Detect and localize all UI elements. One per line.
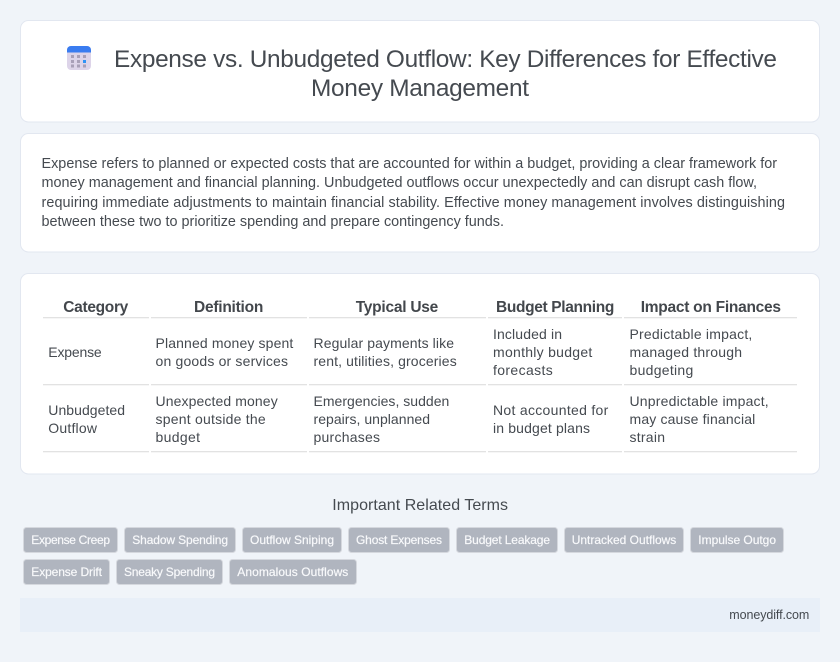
description text: between these two to prioritize spending and prepare contingency funds. <box>42 214 504 230</box>
table header row: Typical Use <box>356 299 439 316</box>
description text: Expense refers to planned or expected costs that are accounted for within a budget, providing a clear framework for <box>42 156 777 172</box>
table row: Unbudgeted Outflow: purchases <box>314 429 380 445</box>
icon: calendar <box>67 46 91 70</box>
tag: Outflow Sniping: Outflow Sniping <box>250 533 334 547</box>
panel: description <box>20 134 820 252</box>
tag: Untracked Outflows: Untracked Outflows <box>572 533 676 547</box>
table row: Expense: Planned money spent <box>156 335 293 351</box>
tag: Sneaky Spending: Sneaky Spending <box>124 565 215 579</box>
table row: Expense: budgeting <box>630 362 693 378</box>
table row: Unbudgeted Outflow: Outflow <box>48 420 98 436</box>
table row: Unbudgeted Outflow: Emergencies, sudden <box>314 393 449 409</box>
panel: related term tags <box>24 528 784 584</box>
table row: Unbudgeted Outflow: budget <box>156 429 200 445</box>
table header row <box>63 299 781 316</box>
tag: Budget Leakage: Budget Leakage <box>464 533 550 547</box>
table row: Unbudgeted Outflow: Unpredictable impact, <box>630 393 769 409</box>
table row: Expense: on goods or services <box>156 353 288 369</box>
tag: Expense Creep: Expense Creep <box>31 533 110 547</box>
table header row: Category <box>63 299 129 316</box>
table row: Expense: monthly budget <box>493 344 592 360</box>
tag: Anomalous Outflows <box>230 560 356 584</box>
table header row: Impact on Finances <box>641 299 781 316</box>
tag: Expense Drift <box>24 560 110 584</box>
table row: Expense: Predictable impact, <box>630 326 752 342</box>
tag: Shadow Spending <box>124 528 236 552</box>
panel: comparison table <box>20 274 820 474</box>
table header row: Definition <box>194 299 263 316</box>
tag: Expense Drift: Expense Drift <box>31 565 103 579</box>
table row: Unbudgeted Outflow: spent outside the <box>156 411 266 427</box>
panel: title header <box>20 20 820 122</box>
tag: Sneaky Spending <box>116 560 222 584</box>
tag: Budget Leakage <box>456 528 558 552</box>
table row: Expense: Expense <box>48 344 102 360</box>
footer source text: moneydiff.com <box>729 608 809 622</box>
table row: Unbudgeted Outflow: strain <box>630 429 665 445</box>
table row: Expense: rent, utilities, groceries <box>314 353 457 369</box>
table row: Unbudgeted Outflow: Unbudgeted <box>48 402 125 418</box>
tag: Ghost Expenses <box>348 528 450 552</box>
title: Expense vs. Unbudgeted Outflow: Key Differences for Effective <box>114 46 777 73</box>
tag: Impulse Outgo: Impulse Outgo <box>698 533 776 547</box>
table header row: Budget Planning <box>496 299 614 316</box>
tag: Ghost Expenses: Ghost Expenses <box>356 533 442 547</box>
description text <box>42 156 785 230</box>
table row: Unbudgeted Outflow: Not accounted for <box>493 402 609 418</box>
table row: Unbudgeted Outflow: in budget plans <box>493 420 590 436</box>
table row: Expense: managed through <box>630 344 742 360</box>
heading: important related terms: Important Related Terms <box>332 497 508 514</box>
table row: Unbudgeted Outflow: Unexpected money <box>156 393 278 409</box>
table row: Unbudgeted Outflow: repairs, unplanned <box>314 411 430 427</box>
tag: Outflow Sniping <box>242 528 342 552</box>
description text: money management and financial planning. Unbudgeted outflows occur unexpectedly and can disrupt cash flow, <box>42 175 757 191</box>
tag: Anomalous Outflows: Anomalous Outflows <box>237 565 348 579</box>
tag: Impulse Outgo <box>690 528 784 552</box>
tag: Expense Creep <box>24 528 118 552</box>
title <box>114 46 777 102</box>
table row: Expense <box>48 326 752 378</box>
table row: Expense: Included in <box>493 326 562 342</box>
title: Money Management <box>311 75 529 102</box>
tag: Untracked Outflows <box>564 528 684 552</box>
description text: requiring immediate adjustments to maintain financial stability. Effective money management involves distinguishing <box>42 195 785 211</box>
footer bar <box>20 598 820 632</box>
tag: Shadow Spending: Shadow Spending <box>132 533 228 547</box>
table row: Expense: forecasts <box>493 362 553 378</box>
table row: Unbudgeted Outflow <box>48 393 769 445</box>
table row: Unbudgeted Outflow: may cause financial <box>630 411 755 427</box>
table row: Expense: Regular payments like <box>314 335 454 351</box>
